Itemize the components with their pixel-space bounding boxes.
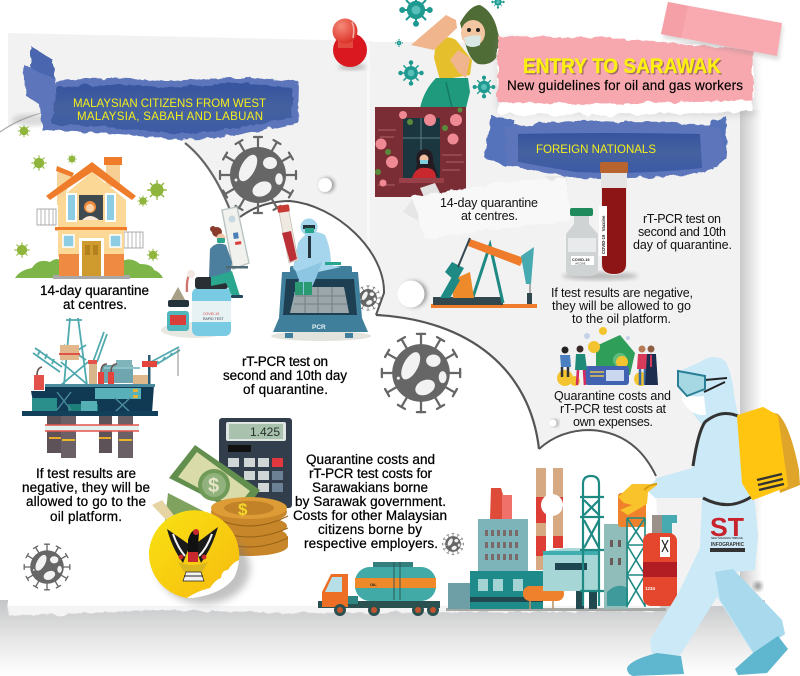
text: quarantine costs left: rT-PCR test costs for — [309, 466, 432, 481]
text: 14-day quarantine left: 14-day quarantine — [40, 283, 149, 298]
text: rT-PCR test right: day of quarantine. — [633, 238, 732, 252]
text: rT-PCR test right: second and 10th — [638, 225, 726, 239]
icon: house — [15, 157, 163, 279]
icon: oil tanker truck: OIL — [370, 582, 377, 587]
icon: hazmat worker with sprayer: INFOGRAPHIC — [711, 542, 744, 548]
icon: calculator, money, coins and Sarawak seal: $ — [208, 475, 219, 497]
icon: calculator, money, coins and Sarawak seal — [149, 418, 292, 604]
icon: hazmat worker with sprayer: ST — [710, 512, 744, 542]
icon: rapid test bottle and woman — [161, 207, 249, 338]
panel: paper sheet background — [8, 33, 740, 606]
icon: blood tube — [599, 162, 628, 275]
text: rT-PCR test left: second and 10th day — [223, 368, 347, 383]
icon: rapid test bottle and woman: COVID-19 — [203, 312, 219, 316]
text: test results left: If test results are — [36, 466, 136, 481]
icon: vaccine vial: VACCINE — [575, 262, 586, 266]
icon: offshore oil platform — [22, 318, 180, 458]
panel: title sheet — [498, 36, 756, 115]
icon: PCR machine and technician: PCR — [312, 324, 326, 331]
icon: blood tube: COVID-19 Vaccine — [601, 215, 606, 254]
text: quarantine costs left: Quarantine costs and — [306, 452, 435, 467]
icon: red push pin — [332, 18, 367, 70]
icon: tape on note — [420, 183, 440, 197]
illustration: woman with raised hand and teal viruses — [395, 0, 504, 108]
text: test results right: they will be allowed to go — [552, 299, 691, 313]
illustration: woman at brick window — [375, 107, 466, 197]
icon: vaccine vial: COVID-19 — [572, 258, 590, 262]
text: quarantine costs right: rT-PCR test costs at — [560, 402, 667, 416]
torn paper bottom edge — [8, 603, 660, 615]
text: 14-day quarantine left: at centres. — [63, 297, 127, 312]
text: quarantine costs left: Sarawakians borne — [312, 480, 428, 495]
icon: refinery skyline — [446, 468, 677, 611]
text: 14-day quarantine left — [40, 283, 149, 312]
text: quarantine costs left: respective employers. — [304, 536, 438, 551]
text: quarantine costs left: citizens borne by — [318, 522, 422, 537]
banner: Malaysian citizens ribbon — [12, 46, 299, 140]
white curved cut-out area — [0, 113, 662, 606]
text: quarantine costs right: own expenses. — [573, 415, 653, 429]
title: ENTRY TO SARAWAK — [524, 56, 722, 80]
text: quarantine costs right: Quarantine costs and — [554, 389, 671, 403]
icon: hazmat worker with sprayer — [618, 357, 800, 676]
icon: hazmat worker with sprayer: NEW SARAWAK TRIBUNE — [711, 536, 743, 540]
icon: vaccine vial — [562, 208, 638, 280]
text: test results right: to the oil platform. — [572, 312, 671, 326]
icon: small virus near text — [442, 533, 464, 555]
text: test results right — [551, 286, 693, 326]
text: rT-PCR test left: of quarantine. — [243, 382, 328, 397]
floor shadow — [0, 600, 765, 676]
side shadow of right sheet — [740, 110, 762, 610]
text: rT-PCR test left: rT-PCR test on — [242, 354, 328, 369]
text: quarantine costs right — [554, 389, 671, 429]
text: test results left: negative, they will be — [22, 480, 150, 495]
text: test results left: allowed to go to the — [26, 494, 146, 509]
icon: small virus near PCR — [356, 286, 380, 310]
icon: PCR machine and technician — [271, 204, 371, 341]
text: rT-PCR test right: rT-PCR test on — [643, 212, 721, 226]
icon: calculator, money, coins and Sarawak seal: $ — [238, 500, 248, 519]
icon: refinery skyline: 1234 — [645, 586, 656, 591]
icon: green virus particles — [14, 125, 167, 261]
text: Malaysian citizens heading — [73, 98, 266, 123]
text: Malaysian citizens heading: MALAYSIAN CITIZENS FROM WEST — [73, 98, 266, 110]
text: quarantine costs left: by Sarawak government. — [295, 494, 446, 509]
text: test results right: If test results are negative, — [551, 286, 693, 300]
title: ENTRY TO SARAWAK — [523, 55, 721, 78]
icon: virus mid — [382, 334, 460, 412]
icon: oil pump jack — [431, 238, 537, 308]
title: New guidelines for oil and gas workers — [507, 78, 743, 93]
icon: group with money — [557, 327, 658, 386]
text: quarantine costs left — [293, 452, 447, 551]
punched holes — [318, 178, 762, 590]
icon: rapid test bottle and woman: RAPID TEST — [203, 317, 224, 321]
icon: virus lower left — [24, 544, 70, 590]
text: Malaysian citizens heading: MALAYSIA, SABAH AND LABUAN — [77, 111, 263, 123]
text: rT-PCR test left — [223, 354, 347, 397]
note card: 14-day quarantine right: 14-day quarantine — [440, 196, 538, 210]
text: quarantine costs left: Costs for other Malaysian — [293, 508, 447, 523]
text: test results left — [22, 466, 150, 524]
note card: 14-day quarantine right: at centres. — [461, 209, 518, 223]
icon: oil tanker truck — [318, 562, 440, 616]
note card: 14-day quarantine right — [403, 176, 572, 238]
text: test results left: oil platform. — [50, 509, 122, 524]
icon: calculator, money, coins and Sarawak seal: 1.425 — [250, 425, 280, 439]
banner: foreign nationals ribbon — [484, 116, 728, 178]
text: rT-PCR test right — [633, 212, 732, 252]
title — [507, 55, 743, 93]
text: foreign nationals heading: FOREIGN NATIONALS — [536, 144, 656, 156]
icon: large virus centre — [220, 137, 296, 213]
decorative tape on title — [661, 2, 783, 60]
